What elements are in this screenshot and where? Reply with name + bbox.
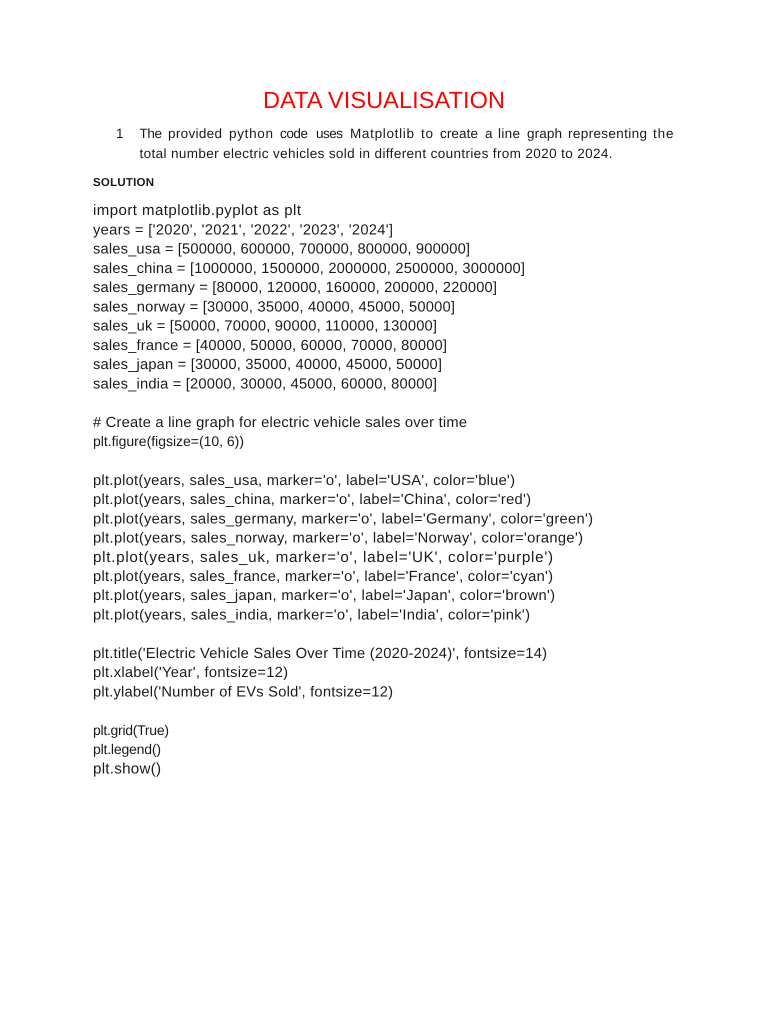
numbered intro paragraph: python — [229, 126, 273, 141]
code: grid, legend and show: plt.legend() — [93, 741, 161, 757]
code: imports and data: years = ['2020', '2021', '2022', '2023', '2024'] — [93, 222, 393, 238]
code: grid, legend and show — [93, 722, 169, 778]
code: imports and data: sales_usa = [500000, 600000, 700000, 800000, 900000] — [93, 242, 470, 258]
code: title and axis labels — [93, 646, 547, 700]
numbered intro paragraph: representing — [568, 126, 647, 141]
code: grid, legend and show: plt.grid(True) — [93, 722, 169, 738]
code: plot calls: plt.plot(years, sales_norway, marker='o', label='Norway', color='orange') — [93, 530, 583, 546]
code: plot calls: plt.plot(years, sales_france, marker='o', label='France', color='cyan') — [93, 569, 553, 585]
numbered intro paragraph: provided — [168, 126, 222, 141]
numbered intro paragraph: the — [653, 126, 674, 141]
numbered intro paragraph: create — [440, 126, 478, 141]
numbered intro paragraph: uses — [316, 126, 343, 141]
code: plot calls — [93, 473, 593, 624]
code: figure setup: # Create a line graph for electric vehicle sales over time — [93, 415, 467, 431]
code: imports and data: sales_china = [1000000, 1500000, 2000000, 2500000, 3000000] — [93, 261, 525, 277]
code: plot calls: plt.plot(years, sales_germany, marker='o', label='Germany', color='green') — [93, 511, 593, 527]
numbered intro paragraph: graph — [527, 126, 562, 141]
code: imports and data: import matplotlib.pyplot as plt — [93, 202, 302, 219]
numbered intro paragraph: The — [140, 126, 162, 141]
code: grid, legend and show: plt.show() — [93, 760, 161, 778]
numbered intro paragraph: a — [485, 126, 493, 141]
code: plot calls: plt.plot(years, sales_usa, marker='o', label='USA', color='blue') — [93, 473, 515, 489]
numbered intro paragraph: Matplotlib — [350, 126, 414, 141]
code: imports and data — [93, 202, 525, 392]
code: title and axis labels: plt.ylabel('Number of EVs Sold', fontsize=12) — [93, 684, 393, 700]
numbered intro paragraph: total number electric vehicles sold in different countries from 2020 to 2024. — [140, 146, 612, 161]
code: imports and data: sales_norway = [30000, 35000, 40000, 45000, 50000] — [93, 300, 455, 316]
code: imports and data: sales_india = [20000, 30000, 45000, 60000, 80000] — [93, 376, 437, 392]
code: imports and data: sales_france = [40000, 50000, 60000, 70000, 80000] — [93, 338, 447, 354]
numbered intro paragraph: to — [421, 126, 433, 141]
title: DATA VISUALISATION — [263, 87, 505, 113]
code: imports and data: sales_japan = [30000, 35000, 40000, 45000, 50000] — [93, 357, 442, 373]
code: plot calls: plt.plot(years, sales_china, marker='o', label='China', color='red') — [93, 492, 531, 508]
code: title and axis labels: plt.title('Electric Vehicle Sales Over Time (2020-2024)', fontsize=14) — [93, 646, 547, 662]
solution heading: SOLUTION — [93, 177, 154, 189]
code: plot calls: plt.plot(years, sales_uk, marker='o', label='UK', color='purple') — [93, 549, 553, 566]
code: figure setup: plt.figure(figsize=(10, 6)) — [93, 433, 244, 449]
numbered intro paragraph: 1 — [116, 126, 124, 141]
numbered intro paragraph — [116, 126, 674, 161]
code: imports and data: sales_germany = [80000, 120000, 160000, 200000, 220000] — [93, 280, 497, 296]
code: title and axis labels: plt.xlabel('Year', fontsize=12) — [93, 665, 288, 681]
code: plot calls: plt.plot(years, sales_india, marker='o', label='India', color='pink') — [93, 608, 530, 624]
numbered intro paragraph: line — [498, 126, 520, 141]
numbered intro paragraph: code — [280, 126, 308, 141]
code: plot calls: plt.plot(years, sales_japan, marker='o', label='Japan', color='brown') — [93, 588, 555, 604]
code: figure setup — [93, 415, 467, 449]
code: imports and data: sales_uk = [50000, 70000, 90000, 110000, 130000] — [93, 319, 437, 335]
